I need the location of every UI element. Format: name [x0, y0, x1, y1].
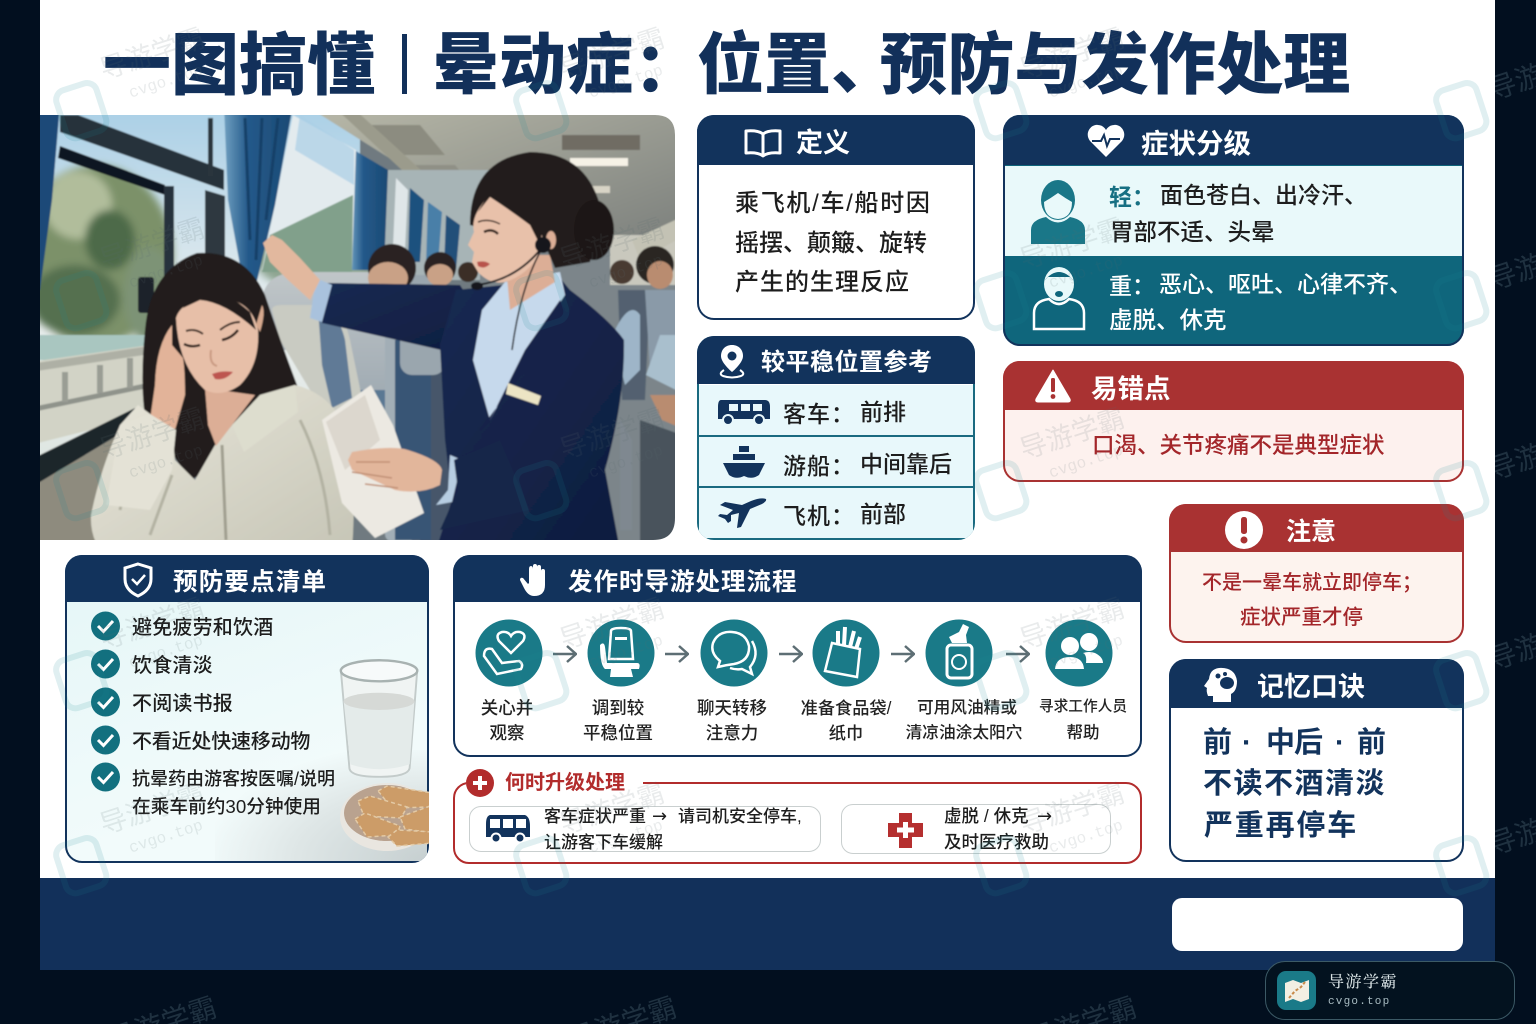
panel: prevention checklist: [65, 555, 429, 863]
watermark layer: 导游学霸: [556, 23, 668, 85]
heading: symptom grades: 症状分级: [1141, 128, 1251, 159]
watermark layer: cvgo.top: [1047, 632, 1125, 672]
icon: head with brain: [1204, 668, 1237, 702]
icon: map logo: [1277, 971, 1316, 1010]
step: seek staff help: 帮助: [1066, 724, 1100, 742]
step: balm on temples: 清凉油涂太阳穴: [906, 723, 1022, 742]
mistake text: 口渴、关节疼痛不是典型症状: [1092, 433, 1385, 458]
definition text: 产生的生理反应: [735, 269, 910, 296]
panel: on-set handling flow: [453, 555, 1142, 757]
heading: handling flow: 发作时导游处理流程: [568, 569, 798, 596]
watermark layer: cvgo.top: [587, 632, 665, 672]
case: severe on coach: [469, 806, 821, 852]
far window strip: [375, 170, 490, 280]
glass of water: [340, 659, 418, 778]
step: chat to distract: 注意力: [706, 723, 758, 743]
row: mild symptoms: 面色苍白、出冷汗、: [1160, 182, 1367, 208]
checklist items: 不看近处快速移动物: [132, 731, 310, 753]
checklist items: 在乘车前约30分钟使用: [132, 796, 321, 817]
heading: common mistake: 易错点: [1091, 374, 1170, 404]
brand name: 导游学霸: [1328, 974, 1398, 991]
panel: definition: [697, 115, 975, 320]
row: airplane: 飞机：: [783, 497, 855, 531]
panel: stable seat positions: [697, 336, 975, 540]
rhyme text: 不读不酒清淡: [1203, 768, 1386, 800]
watermark layer: 导游学霸: [96, 23, 208, 85]
brand badge: [1265, 961, 1515, 1020]
arrow: [1006, 645, 1030, 663]
watermark layer: 导游学霸: [1016, 403, 1128, 465]
passengers back: [368, 244, 416, 292]
row: coach: 前排: [860, 399, 906, 425]
checklist items: 抗晕药由游客按医嘱/说明: [132, 769, 335, 789]
hostess lower arm cuff and hand: [436, 455, 462, 505]
ceiling: [320, 115, 675, 235]
heading: prevention checklist: 预防要点清单: [173, 569, 327, 596]
watermark layer: cvgo.top: [1047, 817, 1125, 857]
woman's seat headrest: [272, 305, 362, 420]
watermark layer: 导游学霸: [96, 213, 208, 275]
hostess hair: [470, 152, 600, 268]
name tag: [506, 383, 541, 405]
title: 晕动症: [432, 28, 633, 103]
icon: red plus: [466, 769, 494, 797]
case: severe on coach: 客车症状严重: [544, 807, 646, 826]
row: mild symptoms: 轻：: [1109, 178, 1155, 212]
photo: guide helping a motion-sick passenger on a bus: [40, 115, 675, 540]
step: seek staff help: [1039, 620, 1127, 742]
icon: warning triangle: [1035, 370, 1071, 402]
case: severe on coach: →: [652, 806, 667, 827]
watermark layer: 导游学霸: [556, 778, 668, 840]
rhyme text: [1203, 727, 1386, 842]
row: airplane: 前部: [860, 501, 906, 527]
step: move to stable seat: 平稳位置: [583, 723, 653, 743]
watermark layer: 导游学霸: [1016, 213, 1128, 275]
step: seek staff help: 寻求工作人员: [1039, 699, 1127, 715]
row: severe symptoms: 虚脱、休克: [1109, 307, 1226, 333]
case: severe on coach: 请司机安全停车,: [678, 807, 802, 826]
heading: caution: 注意: [1286, 518, 1336, 546]
title: ：: [617, 17, 684, 114]
panel: common mistake: [1003, 361, 1464, 482]
watermark layer: cvgo.top: [587, 62, 665, 102]
watermark layer: 导游学霸: [1016, 778, 1128, 840]
headset: [535, 237, 551, 253]
definition text: [735, 190, 932, 296]
watermark layer: cvgo.top: [1047, 442, 1125, 482]
row: severe symptoms: 重：: [1109, 267, 1155, 301]
watermark layer: cvgo.top: [587, 252, 665, 292]
watermark layer: 导游学霸: [1016, 593, 1128, 655]
raised hand: [263, 235, 320, 300]
panel: memory rhyme: [1169, 659, 1464, 862]
panel: when to escalate: [453, 769, 1142, 864]
rhyme text: ·: [1335, 727, 1345, 759]
watermark layer: cvgo.top: [127, 252, 205, 292]
middle curtain: [224, 105, 293, 285]
watermark layer: cvgo.top: [587, 442, 665, 482]
step: observe: 观察: [490, 723, 524, 743]
window frames: [60, 115, 224, 190]
watermark layer: 导游学霸: [96, 403, 208, 465]
case: collapse or shock: 虚脱 / 休克: [944, 806, 1029, 826]
step: chat to distract: [697, 620, 768, 743]
watermark layer: cvgo.top: [127, 442, 205, 482]
row: coach: 客车：: [783, 395, 855, 429]
hand on temple: [150, 325, 185, 430]
row: severe symptoms: [1032, 267, 1412, 333]
step: move to stable seat: [583, 620, 654, 743]
watermark layer: 导游学霸: [556, 593, 668, 655]
icon: open book: [744, 129, 782, 158]
watermark layer: cvgo.top: [127, 632, 205, 672]
bottom navy band: [40, 878, 1495, 970]
watermark layer: cvgo.top: [127, 817, 205, 857]
row: airplane: [699, 488, 973, 538]
case: collapse or shock: →: [1037, 806, 1052, 827]
icon: exclamation circle: [1225, 511, 1263, 549]
windows: [30, 105, 360, 455]
icon: hand: [520, 564, 545, 596]
watermark layer: 导游学霸: [96, 778, 208, 840]
rhyme text: 中后: [1266, 727, 1322, 759]
step: observe: [476, 620, 542, 743]
checklist items: 饮食清淡: [132, 655, 213, 677]
rhyme text: 前: [1357, 727, 1386, 759]
rhyme text: 前: [1203, 727, 1232, 759]
icon: shield check: [124, 562, 152, 598]
watermark layer: 导游学霸: [556, 403, 668, 465]
checklist items: 避免疲劳和饮酒: [132, 617, 273, 639]
heading: when to escalate: 何时升级处理: [505, 772, 625, 794]
interior right: [480, 251, 675, 540]
shirt: [473, 272, 565, 420]
panel: caution: [1169, 504, 1464, 643]
heading: memory rhyme: 记忆口诀: [1257, 672, 1365, 702]
definition text: 摇摆、颠簸、旋转: [735, 230, 927, 257]
title: 一图搞懂: [103, 28, 375, 104]
rhyme text: ·: [1242, 727, 1252, 759]
table shade: [215, 750, 427, 861]
definition text: 乘飞机/车/船时因: [735, 190, 932, 217]
panel: caution: 症状严重才停: [1240, 606, 1363, 629]
heading: definition: 定义: [796, 128, 850, 158]
step: bag and tissue: [801, 620, 892, 743]
rows of seats back: [263, 271, 386, 391]
paper bag: [322, 385, 424, 538]
watermark layer: 导游学霸: [556, 213, 668, 275]
watermark layer: cvgo.top: [587, 817, 665, 857]
step: bag and tissue: 纸巾: [829, 723, 863, 743]
watermark layer: 导游学霸: [96, 593, 208, 655]
watermark layer: cvgo.top: [1047, 252, 1125, 292]
watermark layer: cvgo.top: [127, 62, 205, 102]
step: observe: 关心并: [481, 698, 533, 718]
case: severe on coach: 让游客下车缓解: [544, 833, 663, 852]
brand url: cvgo.top: [1328, 996, 1390, 1008]
icon: heart with pulse: [1088, 124, 1124, 157]
hostess face: [468, 195, 545, 283]
face: [176, 298, 258, 393]
blank white footer box: [1172, 898, 1463, 951]
step: balm on temples: 可用风油精或: [917, 698, 1017, 717]
checklist items: [91, 612, 335, 817]
plate of crackers: [340, 783, 429, 851]
step: bag and tissue: 准备食品袋/: [801, 698, 891, 718]
arrow: [665, 645, 689, 663]
rhyme text: 严重再停车: [1204, 810, 1358, 842]
title: 位置、: [697, 28, 898, 103]
row: cruise ship: 中间靠后: [860, 451, 952, 477]
step: move to stable seat: 调到较: [592, 698, 644, 718]
hostess jacket: [436, 278, 624, 550]
panel: symptom grades: [1003, 115, 1464, 346]
case: collapse or shock: [841, 804, 1111, 854]
row: mild symptoms: 胃部不适、头晕: [1110, 219, 1274, 245]
caution text: 不是一晕车就立即停车；: [1202, 566, 1422, 595]
arrow: [891, 645, 915, 663]
watermark layer: 导游学霸: [1016, 23, 1128, 85]
title: [103, 17, 1350, 114]
row: mild symptoms: [1005, 166, 1462, 256]
checklist items: 不阅读书报: [132, 693, 233, 715]
step: chat to distract: 聊天转移: [697, 698, 767, 718]
neck: [505, 255, 555, 310]
case: collapse or shock: 及时医疗救助: [944, 832, 1049, 852]
icon: location pin: [720, 345, 744, 378]
hostess upper arm: [322, 282, 463, 350]
row: severe symptoms: 恶心、呕吐、心律不齐、: [1159, 271, 1412, 297]
arrow: [779, 645, 803, 663]
left curtain: [40, 115, 60, 290]
sleeve cuff: [106, 414, 176, 510]
row: cruise ship: 游船：: [783, 447, 855, 481]
woman: hair back: [142, 253, 300, 480]
jacket: [91, 385, 354, 550]
row: coach: [699, 385, 973, 437]
step: balm on temples: [906, 620, 1022, 742]
watermark layer: cvgo.top: [1047, 62, 1125, 102]
arrow: [553, 645, 577, 663]
row: cruise ship: [699, 437, 973, 488]
heading: stable positions: 较平稳位置参考: [761, 349, 932, 376]
title: 预防与发作处理: [880, 28, 1350, 103]
